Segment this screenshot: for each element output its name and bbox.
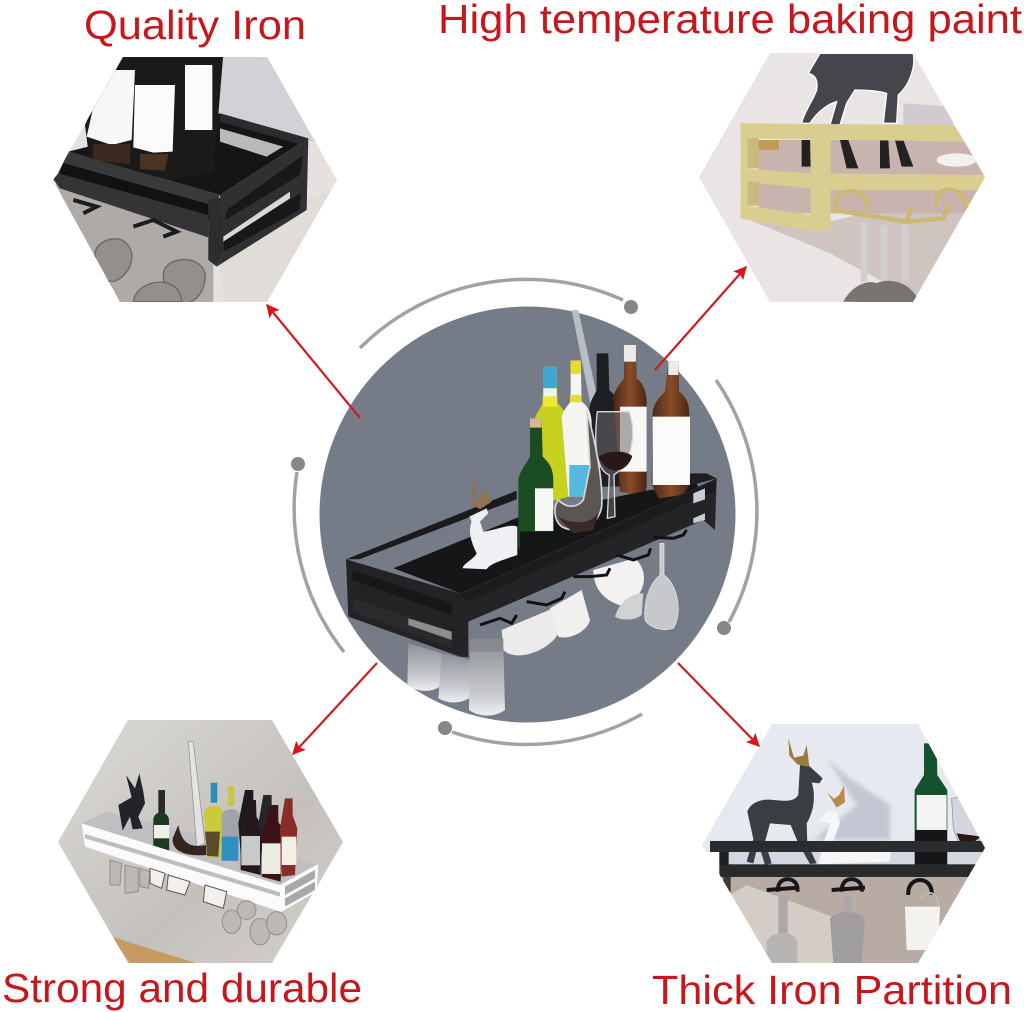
hooks	[480, 530, 687, 625]
stemmed glass right	[645, 543, 678, 630]
white and blue bottle	[562, 361, 595, 497]
arrow to Quality Iron	[267, 305, 360, 418]
glass base	[470, 638, 503, 652]
hanging glasses	[407, 643, 442, 691]
central circle with wine rack	[320, 306, 736, 722]
hexagon photo: gold shelf with deer	[695, 50, 990, 305]
rack shelf top	[393, 483, 703, 593]
title: Strong and durable: Strong and durable	[2, 965, 362, 1011]
hexagon photo: shelf with black and white deer	[698, 720, 990, 970]
rack left end	[346, 559, 468, 657]
dark wine bottle	[589, 353, 620, 487]
shelf top surface	[82, 812, 318, 887]
deer figurine	[802, 53, 914, 125]
hanging mugs and glasses	[110, 860, 287, 945]
corner post	[208, 197, 225, 267]
decorative ring: top arc with dot	[360, 279, 638, 348]
hexagon photo: white shelf with bottles	[55, 718, 347, 966]
green bottle	[915, 743, 947, 865]
rack long front	[460, 478, 717, 657]
brown bottle back	[613, 345, 647, 497]
arrow to High temperature baking paint	[655, 267, 746, 370]
decanter	[188, 742, 205, 847]
green bottle	[518, 418, 553, 557]
bottles	[85, 53, 223, 180]
black deer antlers	[788, 738, 809, 767]
hooks	[833, 190, 967, 222]
white deer figurine	[463, 508, 517, 569]
shelf top	[68, 113, 308, 195]
deer	[118, 773, 145, 831]
decanter body	[555, 410, 602, 530]
decorative ring: right arc with dot	[716, 380, 757, 635]
title: Thick Iron Partition: Thick Iron Partition	[652, 967, 1012, 1012]
wine glass	[951, 797, 981, 841]
yellow bottle	[533, 367, 569, 503]
white deer antlers	[827, 786, 845, 808]
stems and glasses	[861, 222, 908, 282]
gold frame	[741, 123, 987, 231]
title: Quality Iron: Quality Iron	[84, 2, 306, 48]
decanter neck	[572, 310, 600, 410]
white deer	[818, 810, 893, 864]
black deer	[747, 765, 823, 865]
hooks	[767, 879, 932, 895]
shelf side rail	[217, 138, 308, 267]
hexagon photo: black shelf close-up	[50, 53, 340, 307]
white shelf near rail	[82, 823, 318, 912]
deer antlers	[472, 473, 492, 509]
decorative ring: left arc with dot	[291, 457, 344, 652]
brown bottle front	[652, 362, 690, 498]
hanging glasses and cup	[767, 897, 865, 963]
bottles	[158, 790, 165, 813]
rack back rail	[346, 491, 517, 559]
mugs	[502, 608, 558, 655]
arrow to Thick Iron Partition	[678, 663, 759, 746]
shelf front rail	[63, 152, 220, 206]
glasses	[95, 239, 205, 303]
decorative ring: bottom arc with dot	[438, 714, 642, 744]
wine glass	[596, 412, 633, 518]
arrow to Strong and durable	[293, 663, 377, 754]
shelf rails	[710, 841, 985, 852]
